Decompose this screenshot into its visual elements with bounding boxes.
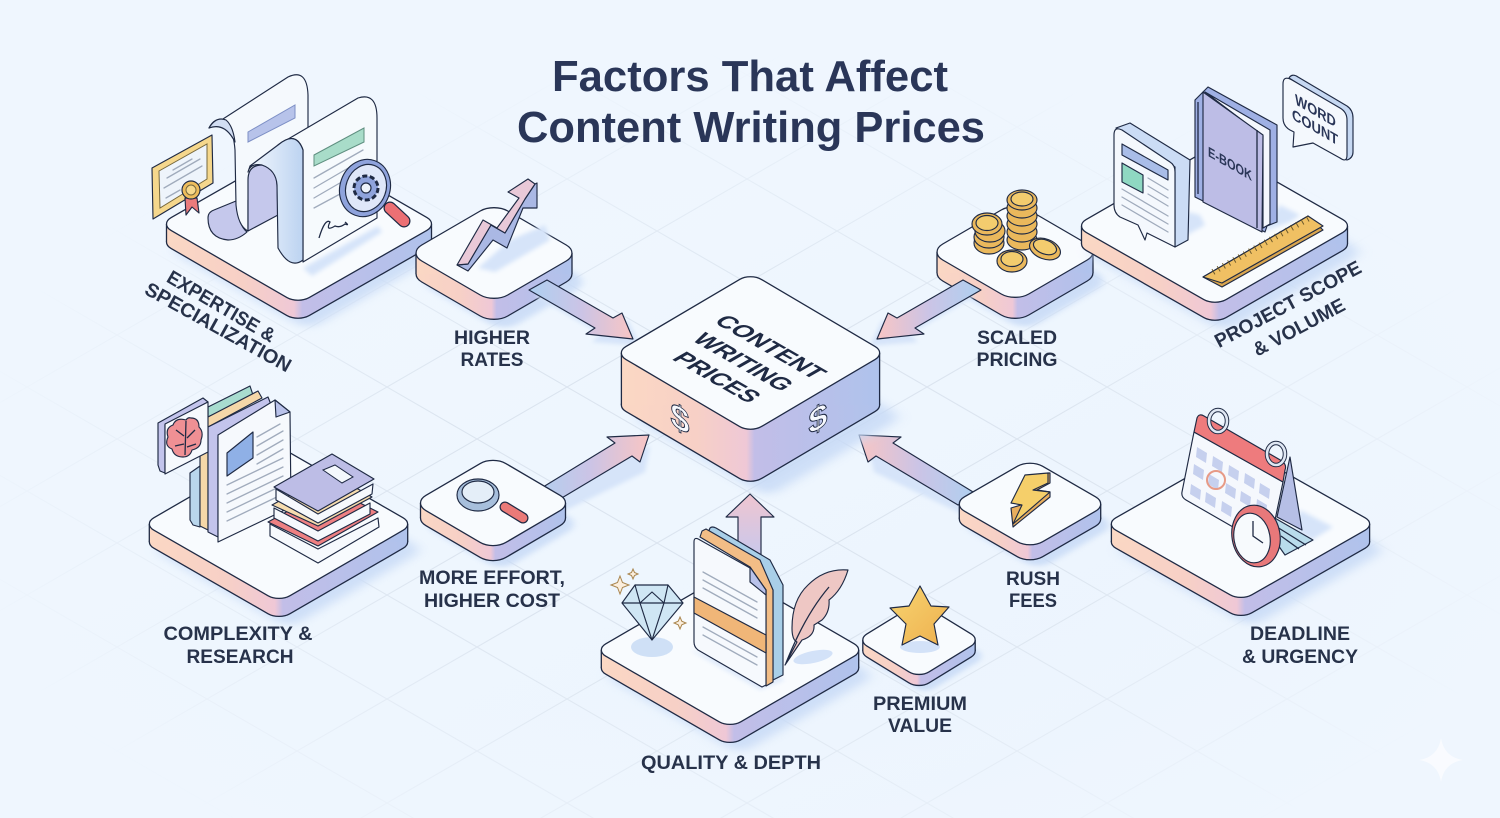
label: rush	[1006, 568, 1060, 612]
icon: e-book: E-BOOK	[1208, 143, 1253, 184]
arrow: scaled pricing to center	[870, 280, 981, 346]
arrow: quality to center	[726, 494, 774, 556]
panel: more effort	[413, 456, 581, 612]
icon: article page	[1114, 123, 1205, 247]
title: Factors That Affect	[552, 52, 948, 101]
panel: project scope and volume	[1075, 75, 1365, 361]
icon: sparkle watermark	[1419, 738, 1463, 782]
label: deadline: & URGENCY	[1242, 646, 1358, 668]
platform: expertise	[160, 144, 448, 330]
label: premium	[873, 693, 967, 737]
icon: layered document	[690, 527, 785, 690]
icon: dollar signs	[671, 394, 827, 443]
platform: rush	[952, 459, 1116, 570]
platform: more effort	[413, 456, 581, 571]
label: expertise: EXPERTISE &	[163, 266, 279, 347]
arrow: rush fees to center	[859, 435, 984, 515]
panel: premium value	[857, 586, 987, 737]
icon: research documents	[190, 386, 291, 542]
panel: higher rates	[408, 179, 640, 371]
label: higher rates: HIGHER	[454, 327, 530, 349]
title	[517, 52, 985, 152]
icon: stacked books	[268, 454, 379, 563]
icon: lightning bolt	[1011, 473, 1050, 527]
label: more effort	[419, 567, 565, 612]
panel: rush fees	[952, 459, 1116, 612]
panel: complexity and research	[143, 386, 424, 668]
label: higher rates	[454, 327, 530, 371]
label: complexity: RESEARCH	[186, 646, 294, 668]
label: project scope: PROJECT SCOPE	[1211, 257, 1365, 353]
icon: dollar signs: $	[671, 394, 689, 443]
label: higher rates: RATES	[460, 349, 524, 371]
arrow: higher rates to center	[529, 280, 640, 346]
label: premium: VALUE	[888, 715, 952, 737]
icon: word count bubble: WORD	[1295, 91, 1336, 132]
label: more effort: HIGHER COST	[424, 590, 560, 612]
icon: feather quill	[785, 570, 848, 667]
arrow: more effort to center	[530, 435, 650, 515]
platform: project scope	[1075, 146, 1364, 332]
label: scaled pricing	[976, 327, 1058, 371]
label: scaled pricing: PRICING	[976, 349, 1058, 371]
platform: content writing prices	[615, 273, 903, 497]
icon: e-book	[1195, 87, 1300, 232]
label: deadline: DEADLINE	[1250, 623, 1350, 645]
icon: coin stacks	[972, 190, 1063, 272]
label: quality: QUALITY & DEPTH	[641, 752, 821, 774]
label: deadline	[1242, 623, 1358, 668]
icon: word count bubble: COUNT	[1292, 106, 1339, 150]
icon: magnifying glass	[457, 479, 523, 518]
label: more effort: MORE EFFORT,	[419, 567, 565, 589]
platform: quality	[595, 572, 875, 754]
text: center block heading: WRITING	[686, 330, 800, 395]
label: complexity: COMPLEXITY &	[164, 623, 312, 645]
platform: premium	[857, 602, 987, 694]
icon: dollar signs: $	[809, 394, 827, 443]
platform: scaled pricing	[929, 202, 1111, 331]
icon: brain bubble	[158, 398, 208, 474]
icon: calendar and clock	[1182, 410, 1333, 571]
panel: scaled pricing	[870, 190, 1111, 371]
platform: higher rates	[408, 203, 590, 332]
label: rush: RUSH	[1006, 568, 1060, 590]
label: rush: FEES	[1009, 590, 1057, 612]
title: Content Writing Prices	[517, 103, 985, 152]
icon: scrolls, certificate and magnifier	[152, 75, 404, 276]
text: center block heading	[666, 312, 832, 407]
icon: diamond	[611, 569, 686, 657]
panel: deadline and urgency	[1105, 410, 1386, 668]
icon: word count bubble	[1283, 75, 1353, 160]
platform: deadline	[1105, 447, 1386, 627]
icon: ruler	[1203, 216, 1323, 287]
panel: expertise and specialization	[141, 75, 448, 377]
panel: quality and depth	[595, 527, 875, 774]
text: center block heading: PRICES	[666, 349, 767, 407]
label: premium: PREMIUM	[873, 693, 967, 715]
label: expertise: SPECIALIZATION	[141, 278, 295, 377]
label: scaled pricing: SCALED	[977, 327, 1057, 349]
text: center block heading: CONTENT	[708, 312, 832, 383]
label: project scope: & VOLUME	[1249, 294, 1349, 361]
icon: rising chart arrow	[457, 179, 550, 272]
panel: center block	[615, 273, 903, 497]
platform: complexity	[143, 446, 424, 628]
label: complexity	[164, 623, 312, 668]
icon: star	[890, 586, 949, 653]
